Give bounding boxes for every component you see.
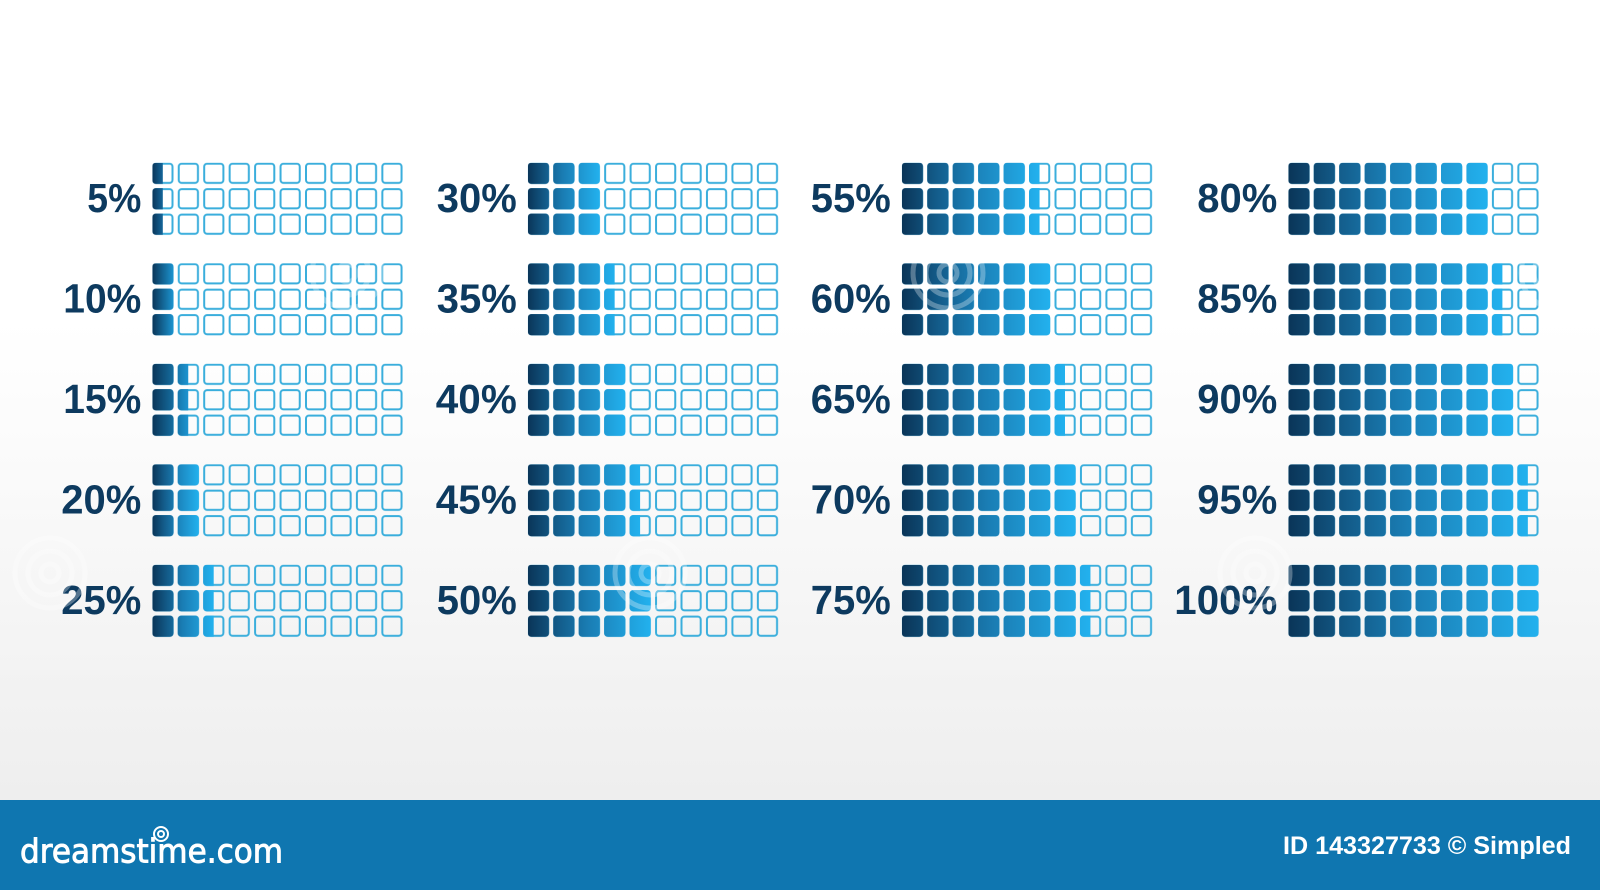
- percent bar: 15%: [63, 364, 404, 438]
- filled cells: [528, 565, 651, 639]
- percent bar: 10%: [63, 263, 404, 337]
- percent bar: 75%: [811, 565, 1154, 639]
- percent bar: 30%: [437, 163, 780, 237]
- logo: dreamstime.com: dreamstime.com: [20, 832, 283, 871]
- empty cells: [1288, 464, 1540, 538]
- percent bar: 85%: [1197, 263, 1540, 337]
- label: 35%: 35%: [437, 276, 517, 322]
- label: 5%: 5%: [87, 175, 141, 221]
- filled cells: [152, 464, 199, 538]
- label: 80%: 80%: [1197, 175, 1277, 221]
- filled cells: [152, 565, 214, 639]
- filled cells: [1288, 364, 1513, 438]
- percent bar: 25%: [61, 565, 404, 639]
- percent bar: 20%: [61, 464, 404, 538]
- icon: spiral: [154, 827, 168, 841]
- column 3: [811, 163, 1154, 639]
- label: 95%: 95%: [1197, 477, 1277, 523]
- label: 100%: 100%: [1174, 577, 1277, 623]
- empty cells: [152, 263, 404, 337]
- footer bar: [0, 800, 1600, 890]
- image id and credit: ID 143327733 © Simpled: [1283, 832, 1571, 860]
- filled cells: [528, 364, 625, 438]
- label: 20%: 20%: [61, 477, 141, 523]
- percent bar: 55%: [811, 163, 1154, 237]
- filled cells: [902, 364, 1065, 438]
- empty cells: [1288, 364, 1540, 438]
- empty cells: [1288, 263, 1540, 337]
- column 4: [1174, 163, 1540, 639]
- filled cells: [902, 263, 1050, 337]
- empty cells: [152, 163, 404, 237]
- filled cells: [528, 263, 615, 337]
- filled cells: [528, 163, 600, 237]
- percent bar: 80%: [1197, 163, 1540, 237]
- percent bar: 35%: [437, 263, 780, 337]
- label: 75%: 75%: [811, 577, 891, 623]
- empty cells: [528, 565, 780, 639]
- label: 85%: 85%: [1197, 276, 1277, 322]
- filled cells: [1288, 163, 1488, 237]
- filled cells: [902, 163, 1040, 237]
- percent bar: 95%: [1197, 464, 1540, 538]
- label: 15%: 15%: [63, 376, 141, 422]
- watermark spirals: [15, 238, 1591, 608]
- label: 25%: 25%: [61, 577, 141, 623]
- filled cells: [1288, 263, 1502, 337]
- empty cells: [152, 364, 404, 438]
- label: 60%: 60%: [811, 276, 891, 322]
- label: 70%: 70%: [811, 477, 891, 523]
- filled cells: [902, 464, 1076, 538]
- empty cells: [902, 263, 1154, 337]
- empty cells: [902, 163, 1154, 237]
- label: 40%: 40%: [436, 376, 517, 422]
- filled cells: [152, 364, 188, 438]
- percent bar: 50%: [437, 565, 780, 639]
- empty cells: [528, 464, 780, 538]
- empty cells: [528, 364, 780, 438]
- empty cells: [528, 163, 780, 237]
- percent bar: 40%: [436, 364, 780, 438]
- label: 50%: 50%: [437, 577, 517, 623]
- empty cells: [152, 565, 404, 639]
- filled cells: [1288, 565, 1539, 639]
- column 1: [61, 163, 404, 639]
- filled cells: [1288, 464, 1528, 538]
- percent bar: 60%: [811, 263, 1154, 337]
- label: 45%: 45%: [436, 477, 517, 523]
- column 2: [436, 163, 780, 639]
- empty cells: [902, 464, 1154, 538]
- percent bar: 70%: [811, 464, 1154, 538]
- filled cells: [528, 464, 640, 538]
- label: 10%: 10%: [63, 276, 141, 322]
- empty cells: [152, 464, 404, 538]
- label: 90%: 90%: [1197, 376, 1277, 422]
- filled cells: [902, 565, 1090, 639]
- label: 65%: 65%: [811, 376, 891, 422]
- label: 30%: 30%: [437, 175, 517, 221]
- empty cells: [902, 364, 1154, 438]
- empty cells: [1288, 163, 1540, 237]
- percent bar: 90%: [1197, 364, 1540, 438]
- percent bar: 45%: [436, 464, 780, 538]
- empty cells: [902, 565, 1154, 639]
- filled cells: [152, 163, 163, 237]
- empty cells: [1288, 565, 1540, 639]
- percent bar: 5%: [87, 163, 404, 237]
- percent bar: 65%: [811, 364, 1154, 438]
- percent bar: 100%: [1174, 565, 1540, 639]
- filled cells: [152, 263, 174, 337]
- empty cells: [528, 263, 780, 337]
- label: 55%: 55%: [811, 175, 891, 221]
